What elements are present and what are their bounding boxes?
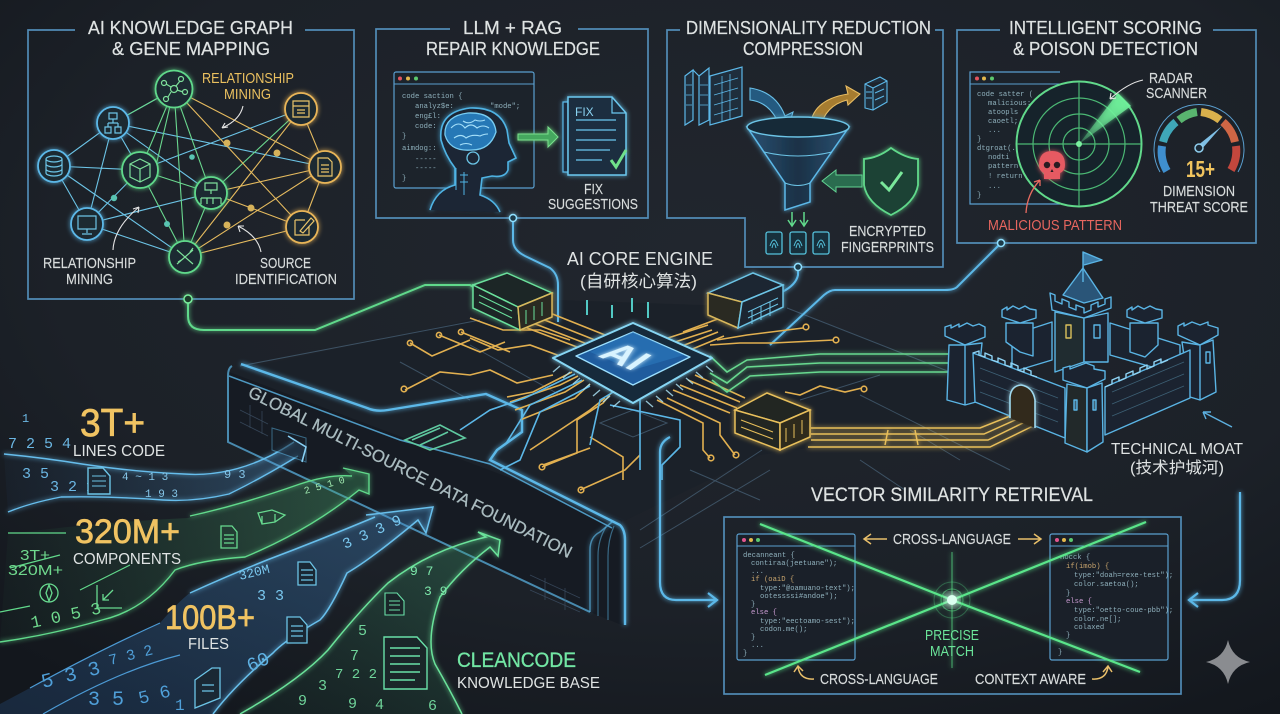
panel title: & GENE MAPPING bbox=[112, 38, 270, 59]
stream numbers bbox=[298, 564, 447, 714]
arrows: bottom callouts bbox=[794, 666, 1112, 679]
icon: document stacks bbox=[685, 67, 742, 125]
label: dimension threat score bbox=[1150, 184, 1248, 216]
panel title: DIMENSIONALITY REDUCTION bbox=[686, 17, 931, 38]
arrow: moat pointer bbox=[1203, 412, 1232, 427]
icon: AI head with brain bbox=[430, 108, 516, 212]
code window: eng£l: bbox=[415, 113, 441, 121]
arrow: funnel down bbox=[788, 212, 808, 226]
icons in stream bbox=[384, 593, 427, 689]
stat: 100B+: FILES bbox=[188, 636, 229, 653]
right code window: else { bbox=[1066, 598, 1092, 606]
code window: code: bbox=[415, 123, 437, 131]
code window: } bbox=[402, 133, 406, 141]
icon: fix document: FIX bbox=[575, 105, 594, 119]
label: radar scanner: SCANNER bbox=[1146, 86, 1207, 102]
label: dimension threat score: DIMENSION bbox=[1163, 184, 1235, 200]
right code window: } bbox=[1066, 632, 1070, 640]
graph nodes bbox=[38, 70, 341, 273]
arrow: shield to funnel bbox=[822, 170, 862, 192]
panel: LLM + RAG repair knowledge bbox=[376, 17, 648, 218]
code window: ... bbox=[988, 127, 1001, 135]
stream numbers: 3 3 bbox=[257, 588, 284, 605]
label: context aware: CONTEXT AWARE bbox=[975, 672, 1086, 688]
stream: green components bbox=[0, 468, 369, 642]
label: source identification bbox=[235, 256, 337, 288]
stream numbers: 9 bbox=[348, 696, 357, 713]
stream: green knowledge base bbox=[240, 532, 500, 714]
label: relationship mining (bottom) bbox=[43, 256, 136, 288]
radar scanner bbox=[1016, 82, 1142, 206]
right code window: type:"doah=rexe-test"); bbox=[1074, 572, 1173, 580]
module: left green server bbox=[473, 273, 552, 330]
right code window bbox=[1050, 534, 1173, 660]
left tower bbox=[945, 323, 985, 405]
callout arrows bbox=[113, 106, 261, 252]
arrows: cross-language bbox=[864, 534, 1041, 544]
module: right blue server bbox=[708, 273, 783, 328]
left code window: } bbox=[751, 634, 755, 642]
label: cross-language bottom: CROSS-LANGUAGE bbox=[820, 672, 938, 688]
stream text: 2 5 1 0 bbox=[303, 476, 346, 498]
stream numbers: 3 3 3 9 bbox=[340, 512, 405, 554]
stream numbers: 7 2 2 bbox=[335, 667, 377, 683]
right code window: colaxed bbox=[1074, 624, 1104, 632]
stream text: 1 0 5 3 bbox=[29, 600, 103, 634]
stream numbers: 3 5 bbox=[88, 689, 124, 712]
connector: panel 2 to chip bbox=[510, 214, 558, 322]
stream numbers: 3 bbox=[318, 678, 327, 695]
connector: panel 4 to platform bbox=[770, 240, 1004, 345]
graph edges bbox=[54, 89, 325, 257]
left code window: else { bbox=[751, 609, 777, 617]
gauge value: 15+ bbox=[1186, 156, 1215, 182]
right code window: color.ne[]; bbox=[1074, 616, 1121, 624]
code window: analyz$e: bbox=[415, 103, 454, 111]
left code window: } bbox=[743, 650, 747, 658]
heading: vector similarity retrieval: VECTOR SIMILARITY RETRIEVAL bbox=[811, 485, 1093, 506]
code window: } bbox=[977, 192, 981, 200]
left code window: codon.me(); bbox=[760, 626, 807, 634]
stream numbers: 9 3 bbox=[224, 468, 246, 482]
panel title: & POISON DETECTION bbox=[1013, 38, 1198, 59]
data foundation label: GLOBAL MULTI-SOURCE DATA FOUNDATION bbox=[245, 383, 575, 562]
stream numbers: 4 bbox=[375, 697, 384, 714]
node icons bbox=[46, 76, 332, 264]
label: cleancode knowledge base bbox=[457, 649, 600, 692]
stream numbers: 7 bbox=[350, 648, 359, 665]
panel title bbox=[1009, 17, 1202, 59]
left code window: ... bbox=[751, 568, 764, 576]
label: source identification: IDENTIFICATION bbox=[235, 272, 337, 288]
code window: } bbox=[977, 136, 981, 144]
label: relationship mining (bottom): RELATIONSHIP bbox=[43, 256, 136, 272]
label: radar scanner: RADAR bbox=[1149, 71, 1193, 87]
code window: ----- bbox=[415, 156, 437, 164]
right tower bbox=[1178, 322, 1218, 400]
stream numbers: 320M bbox=[237, 562, 271, 584]
stream numbers: 1 bbox=[22, 412, 29, 426]
label: radar scanner bbox=[1146, 71, 1207, 102]
isometric platform bbox=[228, 300, 1010, 626]
label: precise match: PRECISE bbox=[925, 627, 979, 644]
stream numbers: 9 bbox=[298, 693, 307, 710]
stat: 320M+ bbox=[73, 513, 181, 568]
left code window: if (oaiD { bbox=[751, 576, 794, 584]
right code window: } bbox=[1066, 590, 1070, 598]
stream: blue lines code bbox=[4, 412, 306, 512]
stream text: 3T+ bbox=[20, 547, 50, 564]
stream numbers bbox=[39, 512, 405, 714]
stream numbers: 9 7 bbox=[410, 564, 433, 579]
circuit traces bbox=[401, 305, 867, 493]
code window: ! return bbox=[988, 173, 1023, 181]
stream numbers: 3 9 bbox=[424, 584, 447, 599]
code window: ... bbox=[988, 183, 1001, 191]
icon: funnel bbox=[747, 117, 849, 210]
left code window: ... bbox=[751, 642, 764, 650]
left code window: decanneant { bbox=[743, 552, 795, 560]
callout arrow bbox=[1110, 80, 1143, 99]
label: encrypted fingerprints: FINGERPRINTS bbox=[841, 240, 934, 256]
panel: dimensionality reduction compression bbox=[667, 17, 943, 267]
code window: code saction { bbox=[402, 93, 462, 101]
panel: AI knowledge graph bbox=[28, 17, 354, 299]
arrow: input into funnel bbox=[750, 88, 793, 132]
graph junction dots bbox=[111, 140, 280, 228]
heading: AI core engine: AI CORE ENGINE bbox=[567, 249, 713, 269]
panel title: LLM + RAG bbox=[463, 17, 562, 38]
stream numbers: 5 3 3 bbox=[39, 658, 103, 695]
stat: 100B+: 100B+ bbox=[165, 599, 255, 637]
label: dimension threat score: THREAT SCORE bbox=[1150, 200, 1248, 216]
arrow: head to fix bbox=[518, 127, 558, 147]
label: relationship mining (bottom): MINING bbox=[66, 272, 113, 288]
label: malicious pattern: MALICIOUS PATTERN bbox=[988, 217, 1122, 234]
AI chip bbox=[553, 323, 713, 407]
castle back towers bbox=[1002, 306, 1180, 375]
front walls bbox=[973, 350, 1190, 438]
icon: document bbox=[88, 468, 110, 494]
stream numbers: 60 bbox=[243, 648, 273, 677]
castle bbox=[945, 252, 1218, 452]
code window: caoetl; bbox=[988, 118, 1018, 126]
stream text bbox=[8, 476, 346, 634]
stream numbers: 7 3 2 bbox=[107, 642, 155, 670]
right code window: type:"oetto-coue-pbb"); bbox=[1074, 607, 1173, 615]
panel title bbox=[686, 17, 931, 59]
stream numbers: 5 6 bbox=[137, 683, 173, 710]
code window: malicious: bbox=[988, 100, 1031, 108]
panel title: REPAIR KNOWLEDGE bbox=[426, 38, 600, 59]
right code window: } bbox=[1058, 649, 1062, 657]
stream numbers bbox=[8, 412, 246, 501]
left code window bbox=[737, 534, 855, 660]
heading: AI core engine: (自研核心算法) bbox=[580, 272, 697, 291]
connector: platform to similarity panel bbox=[660, 437, 717, 607]
left code window: type:"eectoamo-sest"); bbox=[760, 618, 855, 626]
code window: } bbox=[402, 175, 406, 183]
stream numbers: 7 2 5 4 bbox=[8, 436, 71, 453]
right code window: if(imob) { bbox=[1066, 563, 1109, 571]
label: fix suggestions: SUGGESTIONS bbox=[548, 197, 638, 213]
label: cleancode knowledge base: KNOWLEDGE BASE bbox=[457, 675, 600, 692]
panel title: INTELLIGENT SCORING bbox=[1009, 17, 1202, 38]
code window bbox=[970, 72, 1075, 204]
stat: 320M+: 320M+ bbox=[75, 513, 180, 551]
code window: pattern bbox=[988, 163, 1018, 171]
heading: AI core engine bbox=[567, 249, 713, 291]
main keep bbox=[1050, 252, 1111, 372]
stream numbers: 5 bbox=[358, 623, 367, 640]
panel title: COMPRESSION bbox=[743, 38, 863, 59]
code window bbox=[394, 72, 534, 188]
icons in stream bbox=[195, 562, 316, 708]
stream numbers: 3 2 1 bbox=[50, 479, 95, 496]
label: relationship mining (top) bbox=[202, 70, 294, 103]
label: fix suggestions bbox=[548, 182, 638, 213]
match point bbox=[947, 595, 957, 605]
label: encrypted fingerprints bbox=[841, 224, 934, 256]
green and blue traces bbox=[405, 298, 948, 480]
left code window: } bbox=[751, 601, 755, 609]
code window: code satter ( bbox=[977, 91, 1033, 99]
connector: panel 1 to module bbox=[184, 285, 490, 330]
panel title: AI KNOWLEDGE GRAPH bbox=[88, 17, 293, 38]
module: yellow server bbox=[735, 393, 810, 450]
stat: 3T+: 3T+ bbox=[80, 402, 145, 445]
front tower bbox=[1063, 363, 1105, 452]
code window: aimdog:: bbox=[402, 145, 437, 153]
label: cleancode knowledge base: CLEANCODE bbox=[457, 649, 576, 672]
stream numbers: 1 9 3 bbox=[145, 489, 178, 501]
stat: 3T+ bbox=[73, 402, 165, 460]
right code window: nocck { bbox=[1060, 554, 1090, 562]
icon: small server bbox=[865, 77, 887, 110]
label: technical moat: (技术护城河) bbox=[1130, 459, 1224, 477]
icons in stream bbox=[40, 510, 285, 608]
icon: fingerprint cards bbox=[766, 232, 829, 254]
code window: ----- bbox=[415, 165, 437, 173]
label: cross-language top: CROSS-LANGUAGE bbox=[893, 532, 1011, 548]
label: fix suggestions: FIX bbox=[584, 182, 603, 198]
stat: 320M+: COMPONENTS bbox=[73, 551, 181, 568]
label: encrypted fingerprints: ENCRYPTED bbox=[849, 224, 926, 240]
label: precise match bbox=[925, 627, 979, 660]
arrow: malicious callout bbox=[1026, 180, 1040, 213]
code window: atoopls bbox=[988, 109, 1018, 117]
panel: intelligent scoring and poison detection bbox=[957, 17, 1256, 243]
label: relationship mining (top): RELATIONSHIP bbox=[202, 70, 294, 87]
label: source identification: SOURCE bbox=[260, 256, 311, 272]
left code window: ootessssi#andoe"); bbox=[760, 593, 838, 601]
connector: moat to similarity panel bbox=[1189, 492, 1240, 607]
panel: vector similarity bbox=[724, 517, 1181, 694]
connector: panel 3 to module bbox=[782, 264, 802, 292]
label: relationship mining (top): MINING bbox=[224, 86, 271, 103]
match beams bbox=[760, 522, 1146, 675]
threat gauge bbox=[1154, 105, 1244, 172]
castle gate bbox=[1010, 385, 1035, 428]
left code window: type:"@oamuano-text"); bbox=[760, 585, 855, 593]
label: technical moat: TECHNICAL MOAT bbox=[1111, 441, 1243, 458]
arrow: output from funnel bbox=[810, 86, 860, 130]
code window: "mode"; bbox=[490, 103, 520, 111]
gold bus to castle gate bbox=[808, 407, 1033, 447]
stat: 3T+: LINES CODE bbox=[73, 443, 165, 460]
stream text: 320M+ bbox=[8, 562, 63, 579]
stream numbers: 3 5 bbox=[22, 466, 49, 483]
watermark star bbox=[1206, 640, 1250, 684]
chip label: AI bbox=[590, 337, 660, 376]
panel title bbox=[426, 17, 600, 59]
stream numbers: 4 ~ 1 3 bbox=[122, 472, 168, 484]
label: precise match: MATCH bbox=[930, 643, 974, 660]
code window: nodti bbox=[988, 154, 1010, 162]
stream: blue files bbox=[0, 507, 433, 714]
code window: dtgroat(. bbox=[977, 145, 1016, 153]
right code window: color.saetoa(); bbox=[1074, 581, 1139, 589]
icon: skull bbox=[1039, 151, 1065, 179]
icon: fix document bbox=[563, 97, 626, 175]
icon: shield bbox=[864, 148, 918, 215]
panel title bbox=[88, 17, 293, 59]
left code window: contiraa(jeetuane"); bbox=[751, 560, 837, 568]
stat: 100B+ bbox=[165, 599, 255, 653]
label: technical moat bbox=[1111, 441, 1243, 477]
